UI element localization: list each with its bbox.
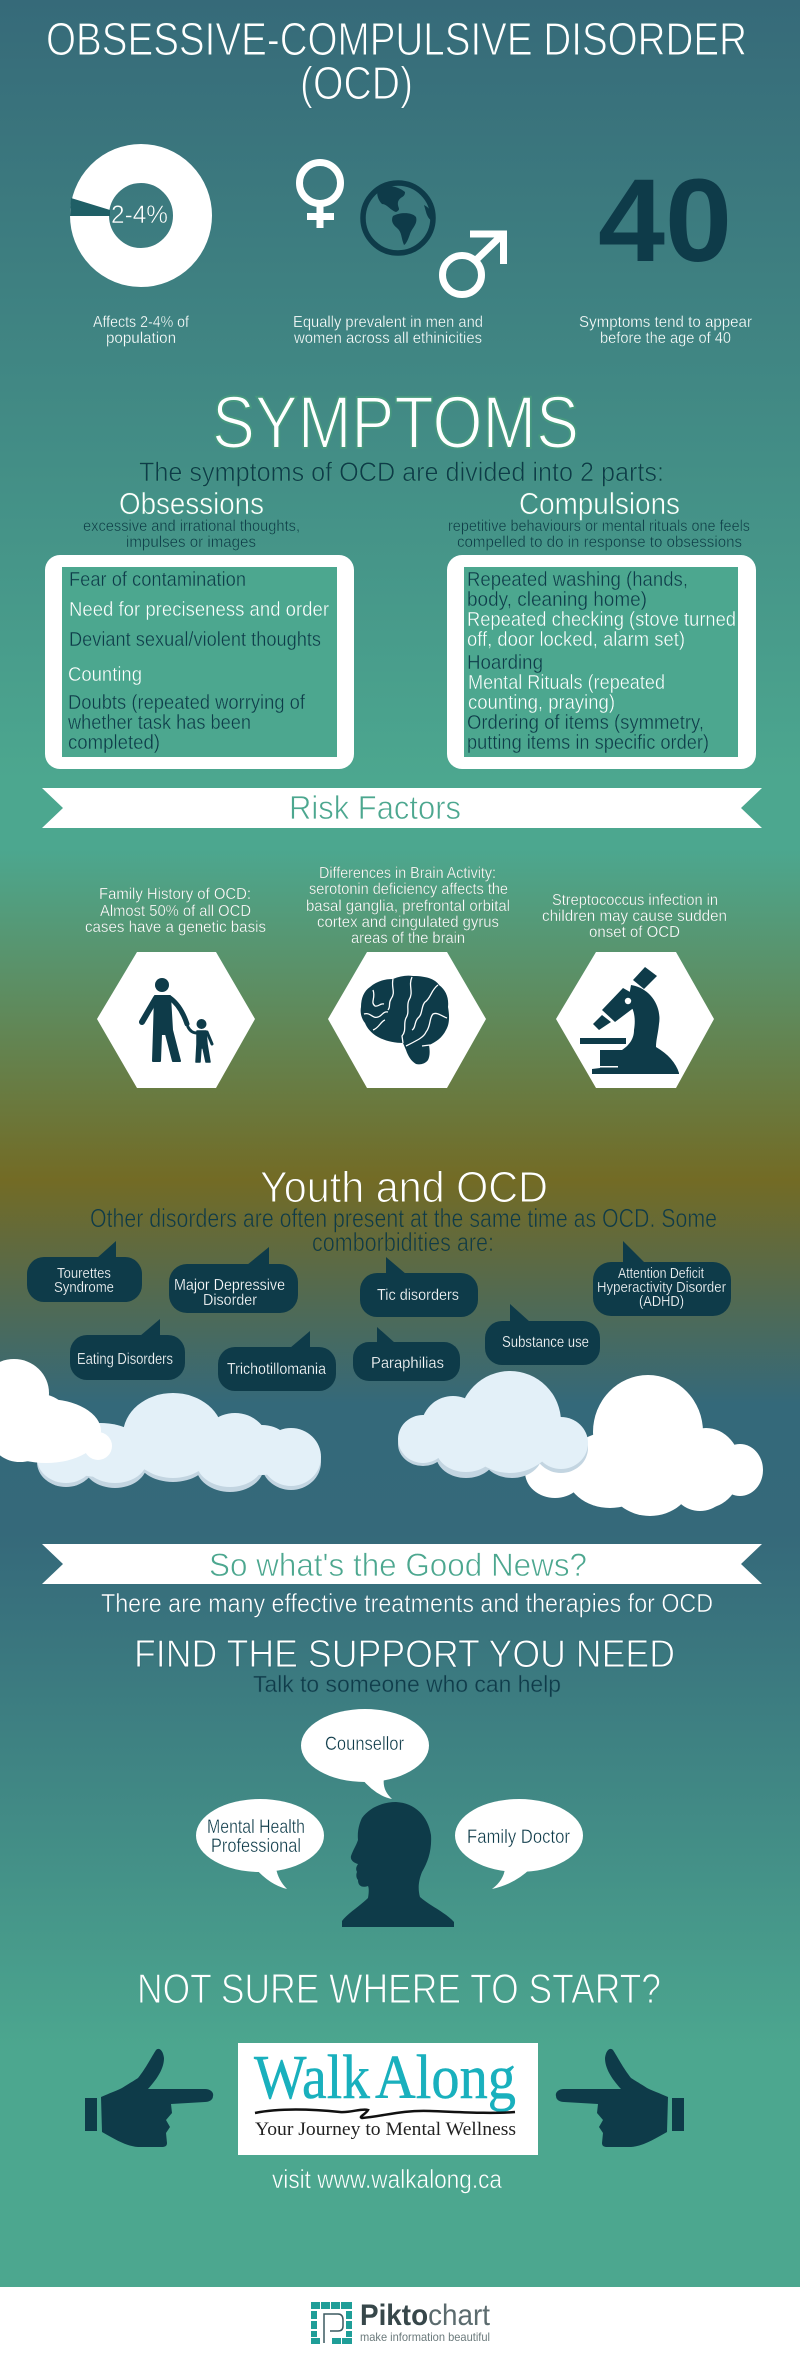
obsessions list: Need for preciseness and order (69, 599, 329, 621)
obsessions list: completed) (68, 732, 160, 754)
speech bubble: trichotillomania (218, 1331, 336, 1391)
compulsions description (448, 518, 750, 551)
stat caption: gender (293, 314, 483, 347)
compulsions list: Repeated washing (hands, (467, 569, 688, 591)
banner: risk factors: Risk Factors (289, 789, 461, 826)
footer (0, 2287, 800, 2360)
stat caption: age: Symptoms tend to appear (579, 314, 753, 331)
cloud: left pale (37, 1393, 321, 1492)
speech bubble: mental health professional: Professional (211, 1836, 301, 1857)
cloud: right white (525, 1375, 763, 1516)
compulsions list: Repeated checking (stove turned (467, 609, 736, 631)
symptoms intro: The symptoms of OCD are divided into 2 parts: (139, 457, 664, 487)
obsessions list (67, 569, 329, 754)
speech bubble: mental health professional: Mental Health (207, 1817, 305, 1838)
heading: find the support: FIND THE SUPPORT YOU NEED (134, 1633, 675, 1676)
family history text: cases have a genetic basis (85, 919, 266, 936)
stat: 2-4% donut chart (70, 164, 192, 268)
family history text: Family History of OCD: (99, 886, 251, 903)
youth intro text: comborbidities are: (312, 1227, 494, 1257)
logo: piktochart mark (311, 2302, 352, 2344)
stat: 2-4% donut chart: 2-4% (111, 201, 168, 229)
brain activity text: areas of the brain (351, 930, 465, 947)
speech bubble: eating disorders: Eating Disorders (77, 1351, 173, 1368)
stat caption: age: before the age of 40 (600, 330, 731, 347)
icon: male symbol (442, 234, 504, 294)
stat: age 40: 40 (598, 155, 732, 287)
speech bubble: tourettes: Syndrome (54, 1279, 114, 1296)
brain activity text: cortex and cingulated gyrus (317, 914, 499, 931)
speech bubble: eating disorders (70, 1319, 185, 1380)
speech bubble: major depressive disorder: Major Depressive (174, 1277, 285, 1294)
obsessions description: excessive and irrational thoughts, (83, 518, 300, 535)
speech bubble: paraphilias: Paraphilias (371, 1355, 444, 1372)
compulsions list: off, door locked, alarm set) (467, 629, 685, 651)
icon: brain (361, 976, 449, 1064)
heading: not sure where to start: NOT SURE WHERE TO START? (137, 1965, 661, 2012)
family history text (85, 886, 266, 936)
title: (OCD) (300, 57, 413, 109)
banner: good news (42, 1544, 762, 1584)
compulsions list: Hoarding (467, 652, 543, 674)
support subheading: Talk to someone who can help (253, 1671, 561, 1697)
youth intro text (90, 1203, 717, 1257)
compulsions heading: Compulsions (519, 486, 680, 521)
speech bubble: ADHD: (ADHD) (639, 1293, 684, 1310)
brain activity text: basal ganglia, prefrontal orbital (306, 898, 510, 915)
obsessions description: impulses or images (126, 534, 256, 551)
hexagon (556, 952, 714, 1088)
obsessions list: Deviant sexual/violent thoughts (69, 629, 321, 651)
obsessions list: whether task has been (67, 712, 251, 734)
brain activity text: Differences in Brain Activity: (319, 865, 496, 882)
compulsions description: compelled to do in response to obsessions (457, 534, 742, 551)
icon: left pointing hand (85, 2049, 213, 2147)
speech bubble: tourettes: Tourettes (57, 1265, 111, 1282)
logo: Walk Along: Your Journey to Mental Wellness (255, 2119, 516, 2140)
website link: visit www.walkalong.ca (272, 2164, 502, 2194)
stat caption: population: Affects 2-4% of (93, 314, 189, 331)
speech bubble: trichotillomania: Trichotillomania (227, 1361, 326, 1378)
icon: microscope (580, 967, 679, 1074)
stat caption: gender: women across all ethinicities (293, 330, 482, 347)
hexagon (328, 952, 486, 1088)
icon: female symbol (300, 162, 340, 228)
icon: head silhouette (342, 1802, 454, 1927)
icon: globe (363, 183, 434, 253)
risk factor: streptococcus (542, 892, 727, 1088)
speech bubble: ADHD: Attention Deficit (618, 1265, 705, 1282)
obsessions heading: Obsessions (119, 486, 264, 521)
obsessions list: Fear of contamination (69, 569, 246, 591)
logo: Walk Along (238, 2043, 538, 2155)
banner: risk factors (42, 788, 762, 828)
speech bubble: family doctor (455, 1799, 583, 1889)
compulsions list: Ordering of items (symmetry, (467, 712, 704, 734)
obsessions frame (45, 555, 354, 769)
icon: right pointing hand (556, 2049, 684, 2147)
heading: symptoms: SYMPTOMS (212, 381, 579, 464)
compulsions list: putting items in specific order) (467, 732, 709, 754)
hexagon (97, 952, 255, 1088)
brain activity text (306, 865, 510, 947)
family history text: Almost 50% of all OCD (100, 903, 251, 920)
cloud: left white (0, 1359, 112, 1463)
compulsions list (467, 569, 736, 754)
good news text: There are many effective treatments and therapies for OCD (101, 1588, 713, 1618)
streptococcus text: children may cause sudden (542, 908, 727, 925)
compulsions frame (447, 555, 756, 769)
speech bubble: ADHD: Hyperactivity Disorder (597, 1279, 726, 1296)
speech bubble: counsellor: Counsellor (325, 1734, 405, 1755)
risk factor: brain activity (306, 865, 510, 1088)
speech bubble: ADHD (593, 1241, 731, 1316)
speech bubble: tourettes (27, 1241, 142, 1302)
speech bubble: mental health professional (196, 1799, 324, 1889)
stat caption: gender: Equally prevalent in men and (293, 314, 483, 331)
stat caption: population (93, 314, 189, 347)
speech bubble: tic disorders: Tic disorders (377, 1287, 459, 1304)
streptococcus text (542, 892, 727, 941)
streptococcus text: onset of OCD (589, 924, 680, 941)
obsessions description (83, 518, 300, 551)
icon: parent and child (142, 978, 212, 1062)
logo: Walk Along: Along (375, 2044, 516, 2112)
speech bubble: family doctor: Family Doctor (467, 1827, 571, 1848)
brain activity text: serotonin deficiency affects the (309, 881, 508, 898)
streptococcus text: Streptococcus infection in (552, 892, 718, 909)
logo: Walk Along: Walk (254, 2044, 370, 2112)
speech bubble: paraphilias (353, 1327, 460, 1381)
heading: youth and OCD: Youth and OCD (260, 1163, 548, 1212)
piktochart wordmark: Piktochart (360, 2299, 491, 2332)
stat caption: population: population (106, 330, 176, 347)
compulsions list: Mental Rituals (repeated (468, 672, 665, 694)
obsessions list: Doubts (repeated worrying of (68, 692, 305, 714)
banner: good news: So what's the Good News? (209, 1547, 587, 1583)
risk factor: family history (85, 886, 266, 1088)
panel: obsessions (45, 486, 354, 769)
speech bubble: tic disorders (360, 1257, 478, 1317)
speech bubble: substance use: Substance use (502, 1334, 589, 1351)
speech bubble: substance use (485, 1304, 600, 1365)
obsessions list: Counting (68, 664, 142, 686)
speech bubble: counsellor (301, 1709, 429, 1799)
compulsions list: body, cleaning home) (467, 589, 647, 611)
piktochart tagline: make information beautiful (360, 2330, 490, 2344)
cloud: right pale (398, 1371, 588, 1478)
title (46, 13, 747, 109)
panel: compulsions (447, 486, 756, 769)
compulsions description: repetitive behaviours or mental rituals one feels (448, 518, 750, 535)
speech bubble: major depressive disorder: Disorder (203, 1292, 258, 1309)
compulsions list: counting, praying) (468, 692, 615, 714)
stat caption: age (579, 314, 753, 347)
speech bubble: major depressive disorder (169, 1247, 298, 1313)
